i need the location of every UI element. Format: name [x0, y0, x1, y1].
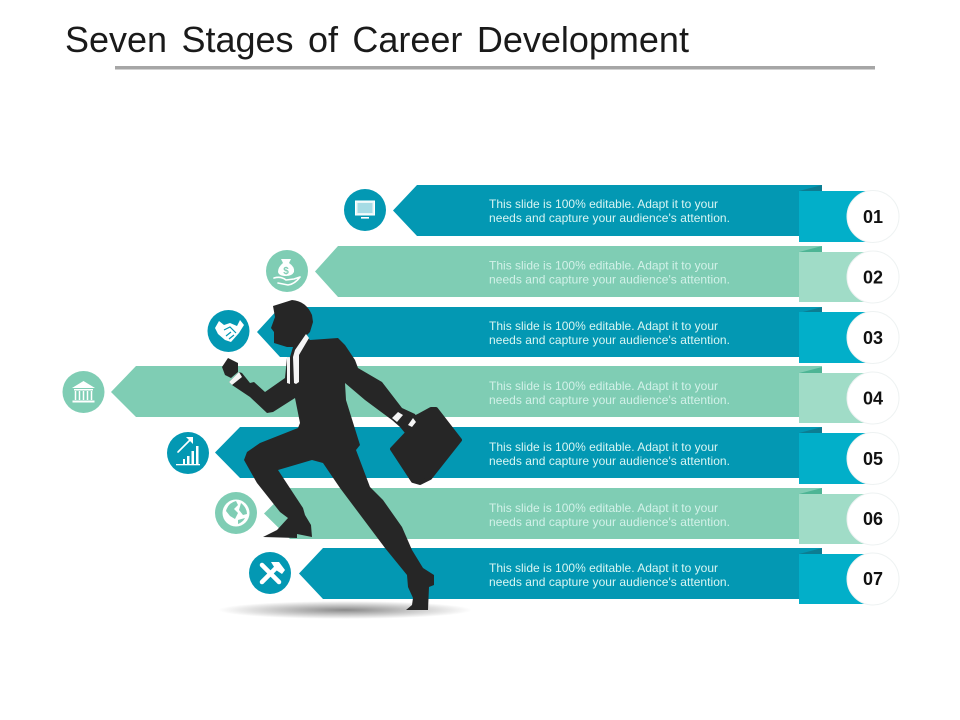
icon: money in hand	[266, 250, 308, 292]
ground shadow	[218, 601, 472, 619]
number 03	[847, 312, 899, 364]
text 03	[489, 319, 730, 347]
icon: globe	[215, 492, 257, 534]
text 06	[489, 501, 730, 529]
icon: bank	[62, 371, 104, 413]
title: Seven Stages of Career Development	[65, 19, 689, 60]
text 04: needs and capture your audience's attention.	[489, 393, 730, 407]
number 01	[847, 190, 899, 242]
panel: stage 06	[215, 488, 899, 545]
text 02: needs and capture your audience's attention.	[489, 272, 730, 286]
ribbon 01	[393, 185, 822, 236]
icon: monitor	[344, 189, 386, 231]
text 07: needs and capture your audience's attention.	[489, 575, 730, 589]
icon: growth chart	[167, 432, 209, 474]
panel: stage 07	[249, 548, 899, 605]
ribbon 04	[111, 366, 822, 417]
icon: money in hand: $	[283, 266, 289, 277]
text 02: This slide is 100% editable. Adapt it to your	[489, 258, 718, 272]
number 07: 07	[863, 569, 883, 589]
text 05: needs and capture your audience's attention.	[489, 454, 730, 468]
text 04	[489, 379, 730, 407]
ribbon 05	[215, 427, 822, 478]
text 07	[489, 561, 730, 589]
text 03: This slide is 100% editable. Adapt it to your	[489, 319, 718, 333]
icon: handshake	[208, 310, 250, 352]
panel: stage 01	[344, 185, 899, 242]
ribbon 06	[264, 488, 822, 539]
text 05: This slide is 100% editable. Adapt it to your	[489, 440, 718, 454]
number 03: 03	[863, 328, 883, 348]
ribbon 03	[257, 307, 822, 357]
icon: tools	[249, 552, 291, 594]
text 01: needs and capture your audience's attention.	[489, 211, 730, 225]
text 06: This slide is 100% editable. Adapt it to your	[489, 501, 718, 515]
number 05: 05	[863, 449, 883, 469]
text 03: needs and capture your audience's attention.	[489, 333, 730, 347]
panel: stage 04	[62, 366, 899, 424]
number 02: 02	[863, 268, 883, 288]
text 05	[489, 440, 730, 468]
number 04: 04	[863, 388, 883, 408]
panel: stage 05	[167, 427, 899, 484]
text 06: needs and capture your audience's attention.	[489, 515, 730, 529]
ribbon 02	[315, 246, 822, 297]
number 04	[847, 372, 899, 424]
number 01: 01	[863, 207, 883, 227]
briefcase	[392, 409, 460, 483]
number 02	[847, 251, 899, 303]
cuff: front	[229, 372, 242, 385]
text 07: This slide is 100% editable. Adapt it to your	[489, 561, 718, 575]
text 02	[489, 258, 730, 286]
number 06: 06	[863, 509, 883, 529]
panel: stage 03	[208, 307, 899, 364]
number 05	[847, 432, 899, 484]
text 01	[489, 197, 730, 225]
ribbon 07	[299, 548, 822, 599]
number 06	[847, 493, 899, 545]
number 07	[847, 553, 899, 605]
text 01: This slide is 100% editable. Adapt it to your	[489, 197, 718, 211]
fist	[222, 358, 238, 378]
panel: stage 02	[266, 246, 899, 303]
shirt and tie	[287, 334, 309, 384]
text 04: This slide is 100% editable. Adapt it to your	[489, 379, 718, 393]
businessman silhouette	[222, 300, 460, 610]
cuff: back	[392, 412, 416, 427]
